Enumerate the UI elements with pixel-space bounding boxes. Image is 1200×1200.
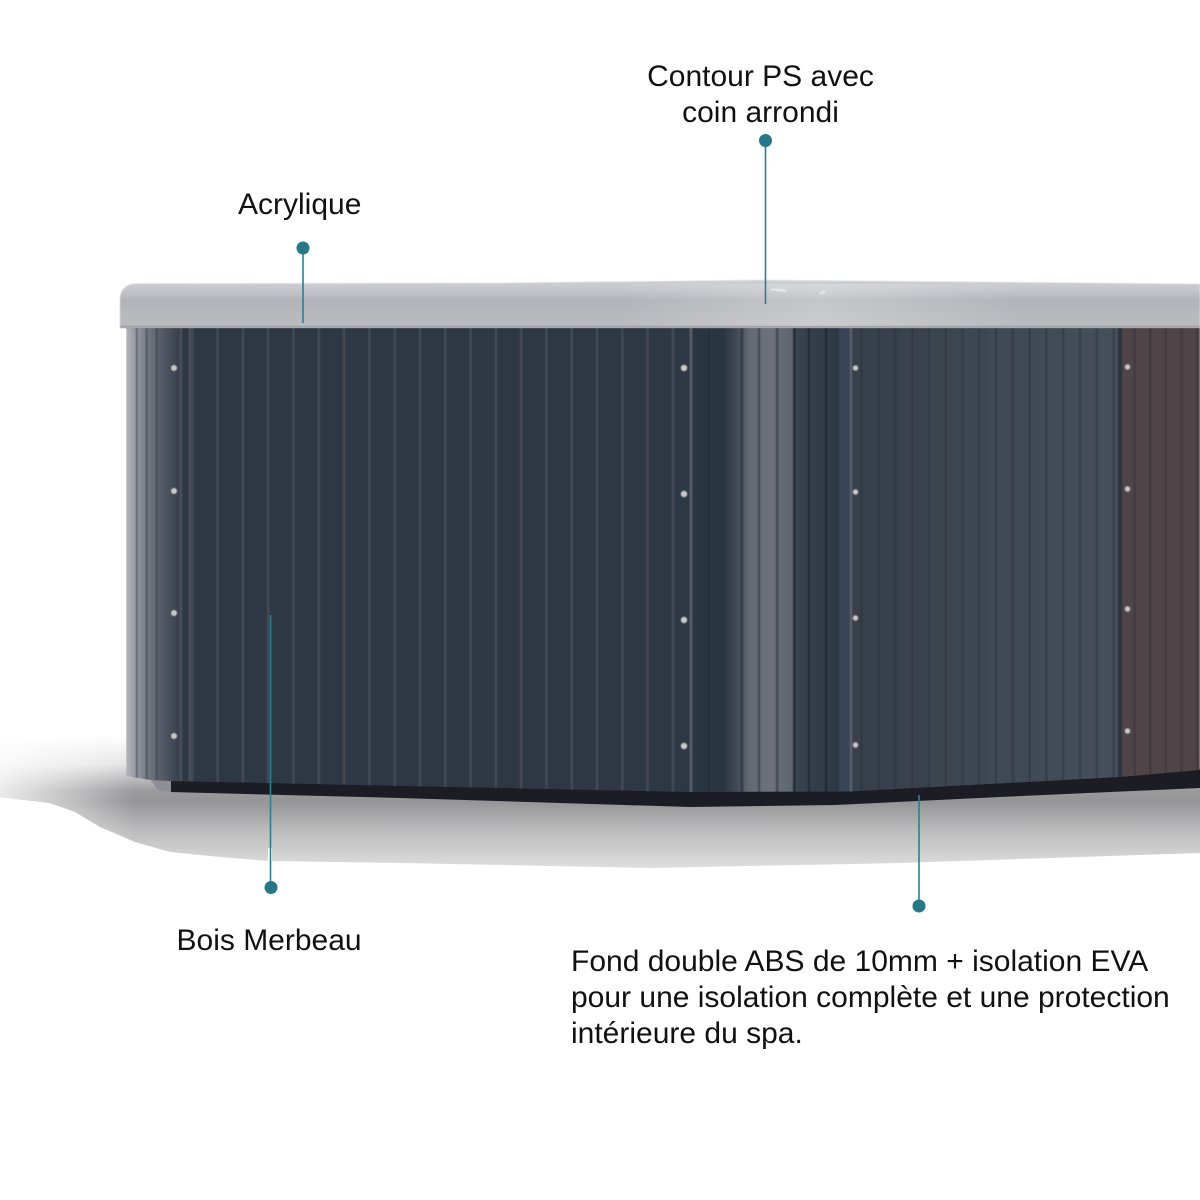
- callout: Contour PS avec coin arrondi: coin arrondi: [682, 96, 839, 129]
- callout: Contour PS avec coin arrondi: [647, 60, 874, 304]
- callout: Fond double ABS: Fond double ABS de 10mm + isolation EVA: [571, 945, 1148, 978]
- right face: [849, 320, 1121, 810]
- brown face: [1122, 320, 1200, 810]
- rivets: [171, 364, 1130, 749]
- panel: acrylic top rim: [120, 280, 1200, 328]
- callout: Contour PS avec coin arrondi: Contour PS avec: [647, 60, 874, 93]
- callout: Acrylique: Acrylique: [238, 188, 361, 221]
- foot at left corner: [150, 779, 171, 792]
- left face: [183, 328, 693, 792]
- panel: wood cladding: [126, 320, 1200, 810]
- spa cabinet: [120, 280, 1200, 810]
- callout: Bois Merbeau: [176, 615, 362, 957]
- ground shadow: [0, 735, 1200, 868]
- callout: Fond double ABS: [571, 795, 1170, 1050]
- callout: Bois Merbeau: Bois Merbeau: [176, 924, 362, 957]
- panel: black double ABS base: [170, 769, 1200, 807]
- callout: Fond double ABS: intérieure du spa.: [571, 1017, 803, 1050]
- corner post: [725, 320, 840, 810]
- callout: Acrylique: [238, 188, 361, 323]
- callout: Fond double ABS: pour une isolation complète et une protection: [571, 981, 1170, 1014]
